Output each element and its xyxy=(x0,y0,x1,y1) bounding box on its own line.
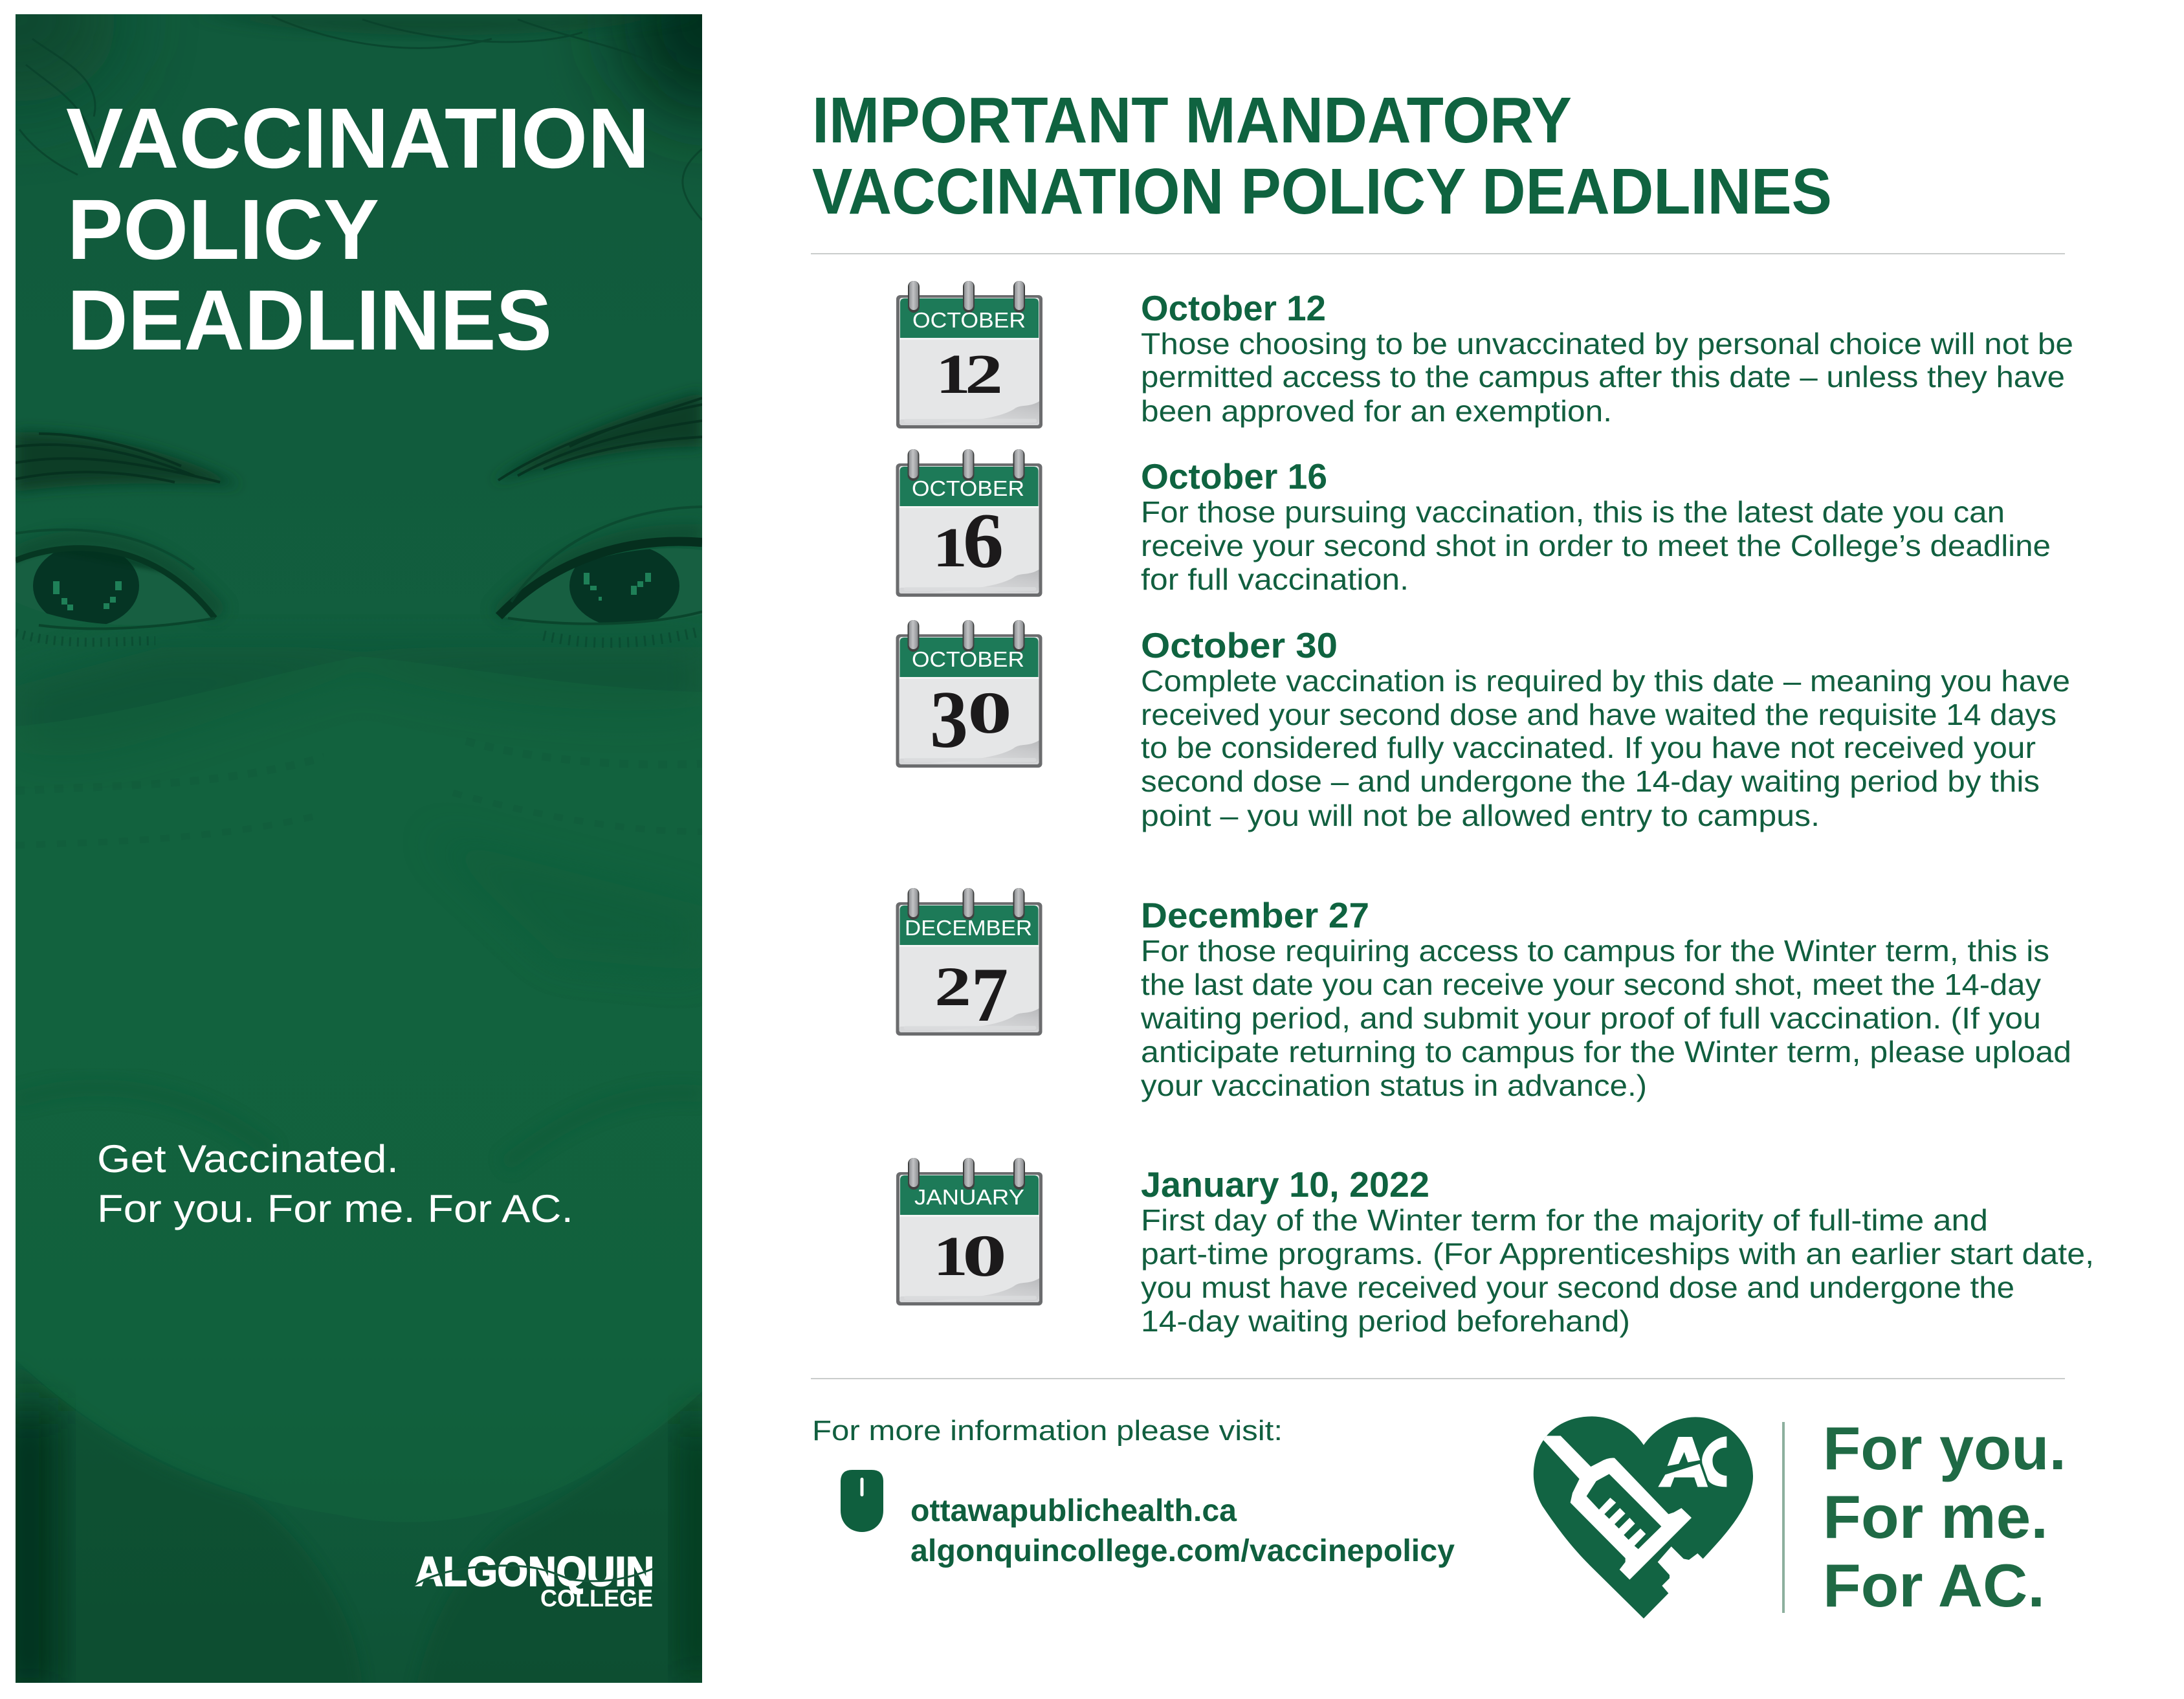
main title: IMPORTANT MANDATORY xyxy=(812,84,1572,157)
slogan: For you. xyxy=(1823,1414,2066,1482)
calendar icon: October 30: OCTOBER xyxy=(912,647,1024,671)
links: ottawapublichealth.ca xyxy=(910,1494,1237,1528)
calendar icon: October 12 xyxy=(896,281,1042,428)
deadline text: January 10, 2022: First day of the Winter term for the majority of full-time and xyxy=(1141,1203,1988,1237)
deadline text: January 10, 2022 xyxy=(1141,1164,2094,1338)
links: algonquincollege.com/vaccinepolicy xyxy=(910,1534,1455,1568)
photo: left eye xyxy=(16,529,220,642)
calendar icon: October 12: OCTOBER xyxy=(912,308,1026,332)
deadline text: October 12 xyxy=(1141,288,2073,428)
slogan: For AC. xyxy=(1823,1551,2045,1619)
icon: computer mouse xyxy=(841,1470,883,1532)
left panel heading xyxy=(66,91,650,368)
deadline text: October 12: October 12 xyxy=(1141,288,1326,328)
deadline text: December 27: the last date you can receive your second shot, meet the 14-day xyxy=(1141,968,2041,1001)
deadline text: October 30: point – you will not be allowed entry to campus. xyxy=(1141,799,1820,832)
deadline text: October 30: to be considered fully vaccinated. If you have not received your xyxy=(1141,731,2036,764)
calendar icon: January 10 xyxy=(896,1158,1042,1305)
left panel tagline: For you. For me. For AC. xyxy=(97,1187,573,1230)
deadline text: October 16: For those pursuing vaccination, this is the latest date you can xyxy=(1141,495,2005,529)
calendar icon: December 27 xyxy=(896,888,1042,1038)
deadline text: December 27: your vaccination status in advance.) xyxy=(1141,1069,1647,1102)
deadline text: October 16: for full vaccination. xyxy=(1141,562,1409,596)
photo: surgical mask xyxy=(75,1407,678,1416)
deadline text: October 12: permitted access to the campus after this date – unless they have xyxy=(1141,360,2065,394)
calendar icon: October 16 xyxy=(896,449,1042,597)
logo: Algonquin College: ALGONQUIN xyxy=(415,1548,654,1595)
deadline text: October 16 xyxy=(1141,456,2051,596)
deadline text: December 27: anticipate returning to campus for the Winter term, please upload xyxy=(1141,1035,2071,1069)
left panel tagline: Get Vaccinated. xyxy=(97,1137,399,1181)
calendar icon: October 30: 3 xyxy=(930,675,968,765)
calendar icon: October 12: 2 xyxy=(965,342,1003,405)
main title: VACCINATION POLICY DEADLINES xyxy=(812,155,1832,228)
deadline text: October 30: received your second dose and have waited the requisite 14 days xyxy=(1141,698,2057,731)
deadline text: December 27: December 27 xyxy=(1141,895,1369,935)
left panel heading: VACCINATION xyxy=(66,91,650,186)
deadline text: January 10, 2022: you must have received your second dose and undergone the xyxy=(1141,1271,2014,1304)
left panel heading: DEADLINES xyxy=(67,272,552,368)
calendar icon: December 27: DECEMBER xyxy=(905,916,1032,940)
deadline text: January 10, 2022: part-time programs. (For Apprenticeships with an earlier start date, xyxy=(1141,1237,2094,1271)
slogan: For me. xyxy=(1823,1483,2048,1551)
photo: hair strands xyxy=(19,16,702,220)
panel: masked face photo background xyxy=(16,14,702,1683)
slogan xyxy=(1823,1414,2066,1619)
calendar icon: October 30 xyxy=(896,620,1042,768)
deadline text: December 27: waiting period, and submit your proof of full vaccination. (If you xyxy=(1140,1001,2041,1035)
deadline text: October 30 xyxy=(1141,625,2070,832)
divider xyxy=(1782,1422,1785,1613)
deadline text: October 12: been approved for an exemption. xyxy=(1141,394,1612,428)
photo: eyebrows xyxy=(16,392,702,492)
left panel tagline xyxy=(97,1137,573,1230)
calendar icon: January 10: 0 xyxy=(962,1223,1007,1289)
calendar icon: December 27: 7 xyxy=(971,951,1008,1038)
calendar icon: October 16: 6 xyxy=(963,498,1004,584)
main title xyxy=(812,84,1832,228)
links xyxy=(910,1494,1455,1568)
deadline text: October 30: second dose – and undergone the 14-day waiting period by this xyxy=(1141,764,2040,798)
deadline text: December 27 xyxy=(1140,895,2071,1102)
deadline text: October 16: receive your second shot in order to meet the College’s deadline xyxy=(1141,529,2051,562)
deadline text: October 30: October 30 xyxy=(1141,625,1338,665)
calendar icon: January 10: 1 xyxy=(933,1225,968,1287)
calendar icon: October 16: OCTOBER xyxy=(912,476,1024,500)
photo: dark corners and shading xyxy=(0,0,789,1696)
calendar icon: October 30: 0 xyxy=(967,680,1012,746)
deadline text: October 16: October 16 xyxy=(1141,456,1327,496)
logo: heart with syringe and AC xyxy=(1534,1416,1753,1619)
logo: Algonquin College: COLLEGE xyxy=(540,1585,653,1612)
deadline text: January 10, 2022: January 10, 2022 xyxy=(1141,1164,1429,1205)
deadline text: January 10, 2022: 14-day waiting period beforehand) xyxy=(1141,1304,1630,1338)
deadline text: October 12: Those choosing to be unvaccinated by personal choice will not be xyxy=(1141,327,2073,361)
calendar icon: January 10: JANUARY xyxy=(914,1185,1024,1209)
calendar icon: December 27: 2 xyxy=(934,955,971,1017)
calendar icon: October 12: 1 xyxy=(936,342,971,405)
deadline text: December 27: For those requiring access to campus for the Winter term, this is xyxy=(1141,934,2049,968)
calendar icon: October 16: 1 xyxy=(932,516,967,579)
deadline text: October 30: Complete vaccination is required by this date – meaning you have xyxy=(1141,664,2070,698)
photo: right eye xyxy=(499,507,702,643)
footer: more information: For more information please visit: xyxy=(812,1415,1283,1447)
left panel heading: POLICY xyxy=(67,182,379,277)
